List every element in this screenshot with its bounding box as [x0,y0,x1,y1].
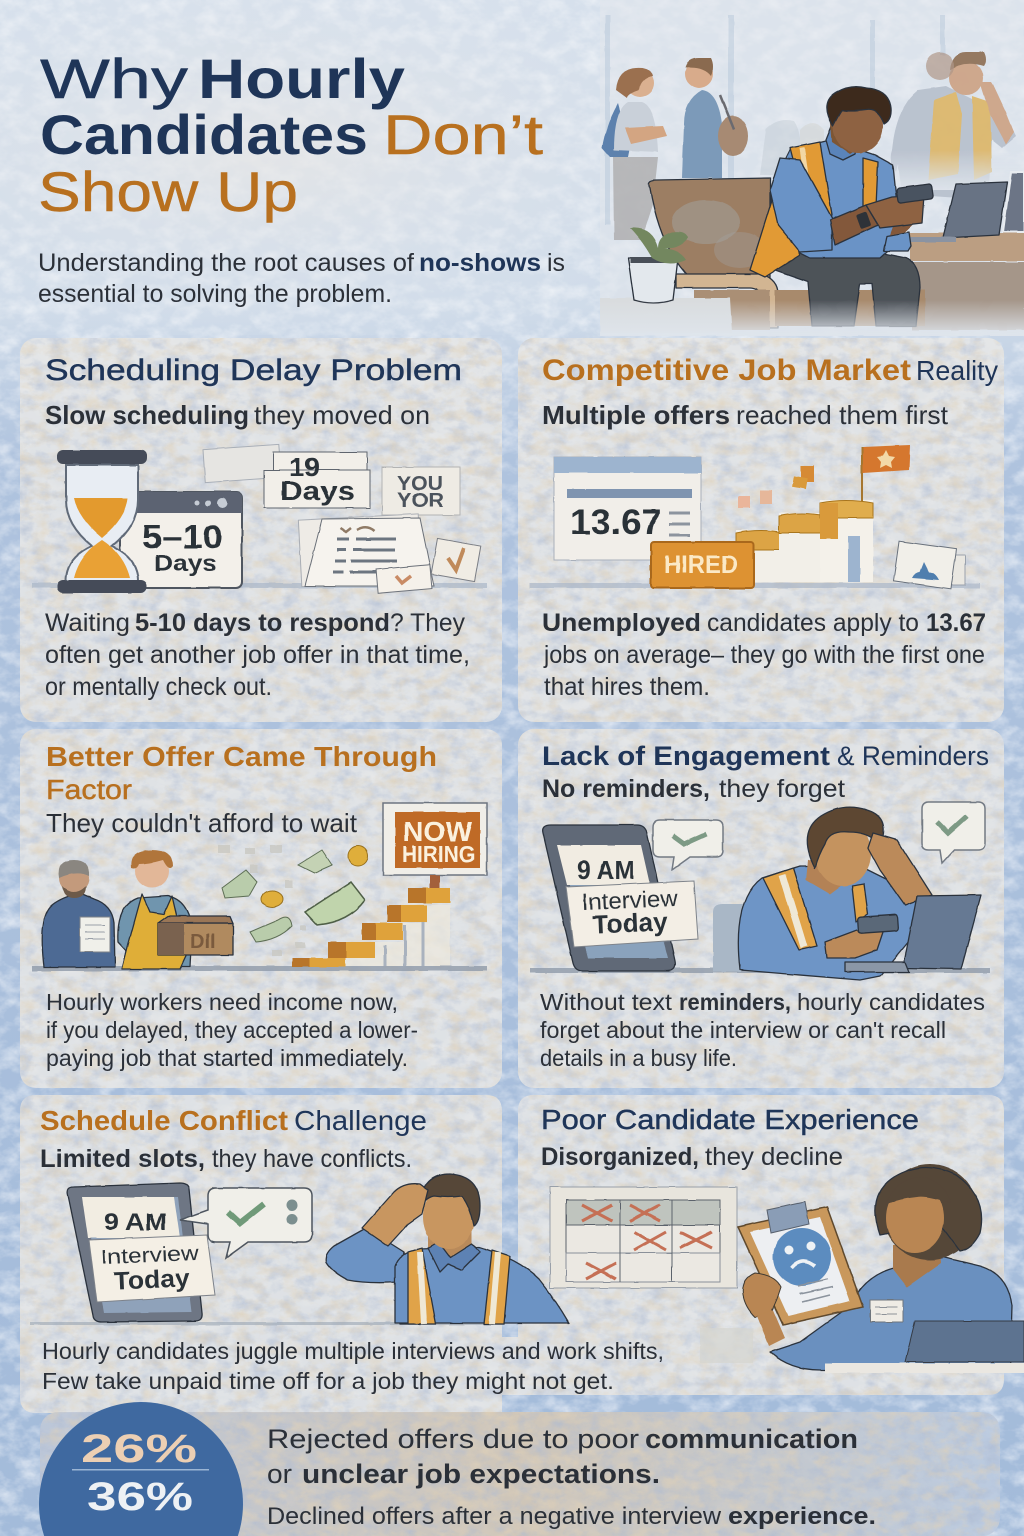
illustration: job board, hired badge, rising steps [530,445,980,589]
subtitle [38,249,565,308]
subheading: Multiple offers [542,400,730,430]
subheading [40,1145,412,1173]
body text: paying job that started immediately. [46,1045,408,1071]
subheading: Limited slots, [40,1145,205,1173]
job board window: 13.67 [570,503,662,542]
subheading: No reminders, [542,775,710,803]
body text [542,609,986,701]
phone reminder [543,825,698,971]
panel: better offer came through factor [20,729,502,1088]
rising orange steps [292,888,450,967]
heading: Lack of Engagement [542,741,830,771]
subheading: reached them first [736,400,949,430]
rising steps and flag [736,445,910,582]
illustration: crossed calendar, clipboard and recruiter [550,1164,1024,1373]
seated worker with phone [750,87,933,326]
subheading: they moved on [254,400,430,430]
heading: Competitive Job Market [542,354,911,387]
body text: Unemployed [542,609,701,637]
hired badge [651,542,754,588]
body text: reminders, [679,989,791,1015]
window backdrop [600,0,1024,335]
speech bubble with check [180,1188,312,1258]
statistic description [267,1424,876,1530]
phone reminder: 9 AM [577,855,635,885]
text block: schedule conflict body: Hourly candidates juggle multiple interviews and work shifts, [42,1338,664,1364]
heading: Schedule Conflict [40,1105,288,1136]
tablet: Today [113,1264,190,1296]
clipboard with sad face [738,1202,863,1346]
now hiring sign: NOW [403,816,473,847]
calendar window [120,492,242,588]
body text [46,989,418,1071]
hero illustration: candidates in waiting area [600,0,1024,336]
panel: poor candidate experience [518,1095,1024,1395]
tablet [68,1183,215,1322]
job board window [554,457,701,560]
background couple shaking hands [602,58,748,240]
body text: ? They [390,609,465,637]
small report card [893,541,965,589]
body text: or mentally check out. [45,673,272,701]
stacked card 19 days: Days [280,476,355,506]
statistic description: Declined offers after a negative interview [267,1503,722,1530]
subtitle: Understanding the root causes of [38,249,414,277]
body text: often get another job offer in that time, [45,641,470,669]
subheading: they forget [719,775,845,803]
body text: forget about the interview or can't recall [540,1017,946,1043]
subheading: They couldn't afford to wait [46,808,358,838]
title [38,47,544,223]
subheading: Disorganized, [541,1143,699,1171]
potted plant [600,228,732,333]
illustration: tablet reminder and stressed worker [30,1174,569,1325]
subheading: they decline [705,1143,843,1171]
card you yor [382,467,460,515]
stat 26%: 26% [81,1427,197,1471]
subheading: they have conflicts. [212,1145,412,1173]
sofa [649,178,925,330]
statistic description: Rejected offers due to poor [267,1424,639,1454]
panel: scheduling delay problem [20,338,502,722]
heading: & Reminders [837,741,989,771]
body text [540,989,985,1071]
illustration: workers, money and now hiring sign [32,803,487,971]
title: Candidates [40,103,368,166]
worker with box: DII [190,931,216,953]
subheading [542,775,845,803]
laptop [845,895,981,972]
tablet: Interview [100,1242,200,1269]
body text: Waiting [45,609,130,637]
title: Why [40,47,188,110]
statistic description: or [267,1459,292,1489]
title: Don’t [383,103,544,166]
hired badge: HIRED [664,551,738,579]
phone reminder: Interview [581,885,679,915]
stacked card 19 days: 19 [289,452,320,482]
now hiring sign: HIRING [402,841,475,867]
document stack [298,514,434,586]
subheading: Slow scheduling [45,400,249,430]
calendar window: 5–10 [142,518,223,555]
hero fade [600,300,1024,336]
heading: Better Offer Came Through [46,741,437,772]
worker with box [118,850,233,969]
body text: Without text [540,989,673,1015]
body text: 13.67 [926,609,986,637]
panel: competitive job market reality [518,338,1004,722]
speech bubble check [653,820,723,870]
text block: schedule conflict body [42,1338,664,1394]
heading: Reality [916,355,998,386]
panel: bottom statistics [39,1402,1000,1536]
desk and laptops [910,172,1024,330]
body text: details in a busy life. [540,1045,737,1071]
body text: 5-10 days to respond [135,609,390,637]
speech bubble check right [922,802,985,863]
subheading [541,1143,843,1171]
flying money [218,845,368,956]
heading: Challenge [294,1105,427,1136]
stat 36%: 36% [87,1475,193,1519]
subheading [45,400,430,430]
worker with papers [42,860,115,967]
panel: lack of engagement and reminders [518,729,1004,1088]
illustration: phone reminder and forgetful worker [530,802,990,980]
heading: Poor Candidate Experience [541,1104,919,1135]
statistic description: communication [645,1424,858,1454]
heading: Scheduling Delay Problem [45,354,462,387]
heading: Factor [46,774,132,805]
stressed worker [326,1174,569,1324]
panel: schedule conflict challenge [20,1095,569,1413]
body text: if you delayed, they accepted a lower- [46,1017,418,1043]
crossed-out schedule calendar [550,1187,737,1288]
statistic description: experience. [728,1503,876,1530]
stacked card 19 days [264,452,370,508]
body text [45,609,470,701]
now hiring sign [383,803,487,888]
title: Show Up [38,160,298,223]
check cards [376,538,481,593]
subtitle: no-shows [419,249,541,277]
illustration: hourglass and waiting documents [32,444,487,593]
hourglass [57,450,147,593]
subtitle: is [547,249,565,277]
heading [46,741,437,805]
body text: that hires them. [544,673,710,701]
recruiter [770,1164,1012,1370]
text block: schedule conflict body: Few take unpaid time off for a job they might not get. [42,1368,614,1394]
body text: Hourly workers need income now, [46,989,398,1015]
body text: hourly candidates [797,989,985,1015]
tablet: 9 AM [104,1209,167,1236]
phone reminder: Today [592,906,669,940]
heading [542,741,989,771]
body text: candidates apply to [707,609,919,637]
worker with hand on head [713,807,932,980]
statistic description: unclear job expectations. [302,1459,660,1489]
body text: jobs on average– they go with the first one [543,641,985,669]
stat circle [39,1402,243,1536]
small note [203,444,281,483]
laptop [825,1321,1024,1373]
calendar window: Days [154,550,217,576]
background man on phone [880,52,1024,200]
subtitle: essential to solving the problem. [38,280,392,308]
card you yor: YOU [397,473,443,495]
subheading [542,400,949,430]
faded desk box [700,1328,753,1363]
title: Hourly [198,47,405,110]
heading [40,1105,427,1136]
card you yor: YOR [397,490,445,512]
